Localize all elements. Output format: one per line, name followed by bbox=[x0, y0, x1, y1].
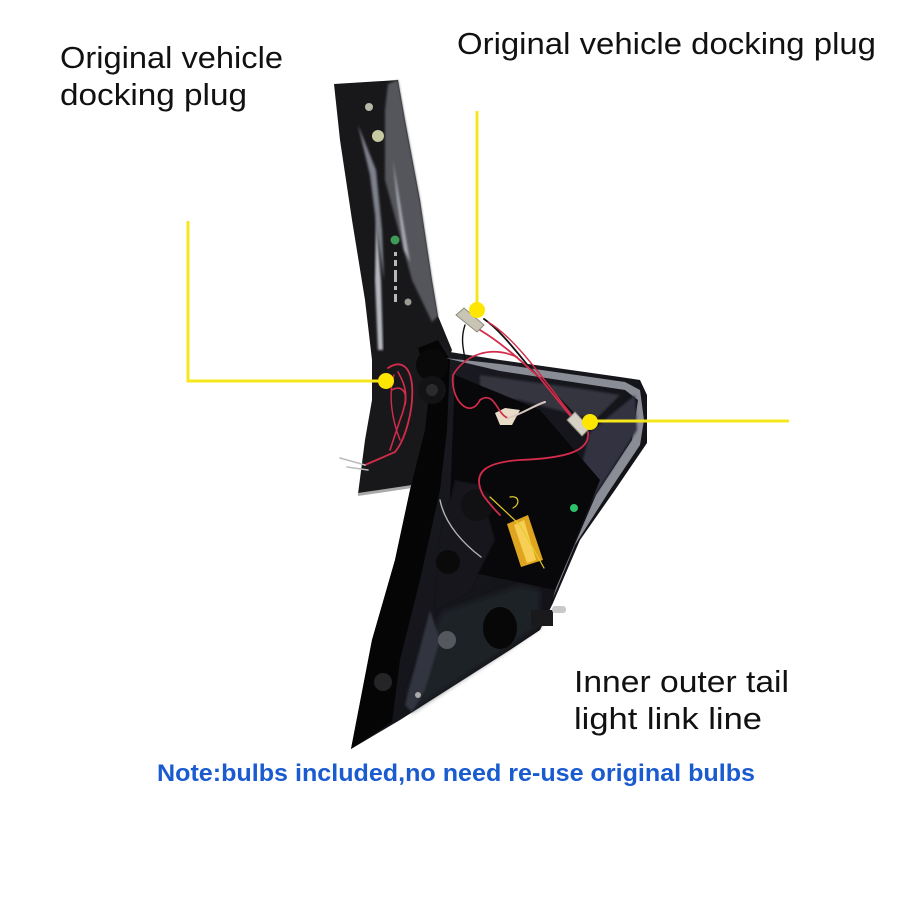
side bulb socket bbox=[531, 606, 566, 626]
callout line: left plug bbox=[188, 221, 394, 389]
connector: top plug bbox=[456, 308, 484, 332]
inner tail light bbox=[334, 80, 452, 496]
mounting studs bbox=[365, 103, 412, 306]
label: inner outer tail light link line: Inner outer tail bbox=[574, 664, 789, 699]
label: left docking plug: Original vehicle bbox=[60, 40, 283, 75]
label: top docking plug: Original vehicle docking plug bbox=[457, 26, 876, 61]
rear mount ring bbox=[416, 349, 448, 404]
callout line: top plug bbox=[469, 111, 485, 318]
outer tail light bbox=[351, 340, 647, 749]
connector: right plug bbox=[567, 412, 590, 436]
note: Note:bulbs included,no need re-use original bulbs bbox=[157, 760, 755, 787]
round ports bbox=[374, 489, 517, 698]
wiring bbox=[340, 319, 588, 568]
callout line: right plug bbox=[582, 414, 789, 430]
label: inner outer tail light link line bbox=[574, 664, 789, 736]
label: inner outer tail light link line: light link line bbox=[574, 701, 762, 736]
gold resistor bbox=[507, 515, 543, 567]
green indicator bbox=[570, 504, 578, 512]
label: left docking plug bbox=[60, 40, 283, 112]
bulb holder bbox=[495, 408, 520, 425]
label: left docking plug: docking plug bbox=[60, 77, 247, 112]
